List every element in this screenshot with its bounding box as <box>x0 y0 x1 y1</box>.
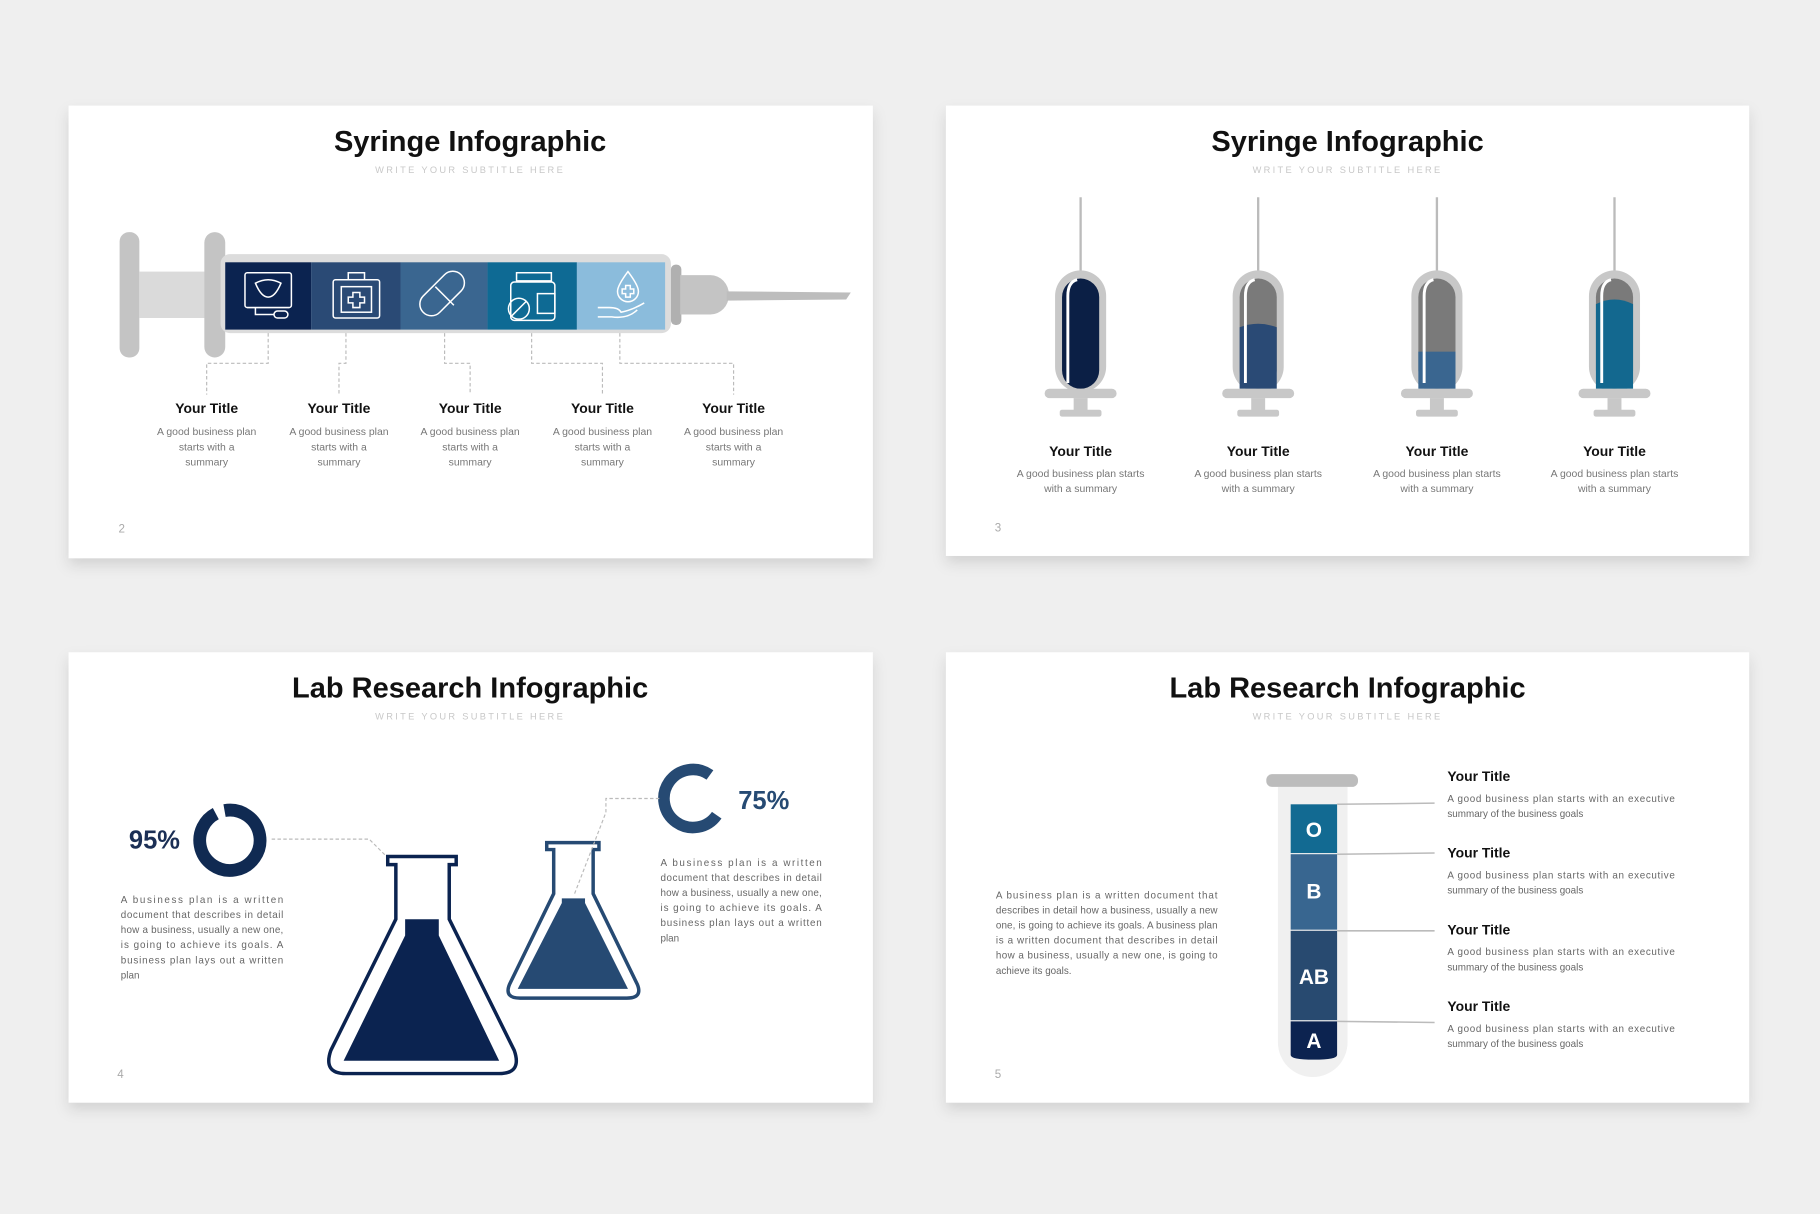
panel: syringe infographic 1 <box>69 106 873 558</box>
test tube: O <box>1306 819 1322 842</box>
text block right: plan <box>660 933 679 944</box>
subtitle: WRITE YOUR SUBTITLE HERE <box>375 712 565 722</box>
item labels: A good business plan starts with an executive <box>1447 871 1675 882</box>
item labels: A good business plan <box>684 427 783 438</box>
item labels: starts with a <box>575 442 630 453</box>
item labels: Your Title <box>571 400 634 416</box>
subtitle: WRITE YOUR SUBTITLE HERE <box>375 165 565 175</box>
test tube: A <box>1306 1030 1321 1053</box>
item labels: Your Title <box>1447 921 1510 937</box>
test tube: B <box>1306 880 1321 903</box>
text block left: one, is going to achieve its goals. A business plan <box>996 920 1218 931</box>
item labels: starts with a <box>179 442 235 453</box>
syringe labels: Your Title <box>1227 443 1290 459</box>
item labels: A good business plan <box>289 427 389 438</box>
syringe labels: Your Title <box>1405 443 1469 459</box>
text block left: how a business, usually a new one, is going to <box>996 951 1218 962</box>
syringe 4 <box>1579 197 1650 417</box>
item labels: summary of the business goals <box>1447 809 1583 820</box>
syringe labels: A good business plan starts <box>1194 469 1322 480</box>
page number: 5 <box>995 1068 1001 1081</box>
text block right: business plan lays out a written <box>660 918 822 929</box>
item labels: summary <box>581 457 625 468</box>
item labels: A good business plan <box>157 427 256 438</box>
syringe horizontal <box>120 232 851 357</box>
item labels: Your Title <box>175 400 238 416</box>
subtitle: WRITE YOUR SUBTITLE HERE <box>1253 165 1443 175</box>
text block left <box>996 890 1218 977</box>
syringe labels <box>1017 443 1678 495</box>
title: Syringe Infographic <box>1211 126 1484 158</box>
text block left: document that describes in detail <box>121 910 283 921</box>
text block right <box>660 858 822 944</box>
connector lines <box>207 333 734 395</box>
syringe labels: with a summary <box>1399 484 1474 495</box>
test tube: AB <box>1299 966 1329 989</box>
syringe 3 <box>1401 197 1473 417</box>
item labels: summary of the business goals <box>1447 886 1583 897</box>
panel: lab research test tube <box>946 652 1749 1103</box>
small flask <box>508 843 639 998</box>
item labels: summary of the business goals <box>1447 962 1583 973</box>
item labels: summary of the business goals <box>1447 1039 1583 1050</box>
item labels: summary <box>449 457 492 468</box>
dashed pointer right <box>575 799 659 894</box>
syringe labels: with a summary <box>1221 484 1296 495</box>
text block right: how a business, usually a new one, <box>660 888 822 899</box>
item labels: A good business plan starts with an executive <box>1447 1024 1675 1035</box>
icon: medicine bottle <box>508 273 555 320</box>
item labels: Your Title <box>702 400 765 416</box>
item labels: A good business plan starts with an executive <box>1447 947 1675 958</box>
syringe 1 <box>1045 197 1117 417</box>
item labels: Your Title <box>1447 845 1510 861</box>
connector lines <box>1337 803 1435 1022</box>
text block left: business plan lays out a written <box>121 955 283 966</box>
icon: capsule <box>415 266 469 321</box>
icon: first aid kit <box>333 273 380 318</box>
item labels: Your Title <box>1447 998 1510 1014</box>
syringe labels: with a summary <box>1043 484 1118 495</box>
95% ring <box>129 805 265 875</box>
text block left: achieve its goals. <box>996 966 1072 977</box>
item labels: A good business plan <box>421 427 520 438</box>
text block right: A business plan is a written <box>660 858 822 869</box>
item labels: Your Title <box>439 400 502 416</box>
test tube <box>1266 774 1358 1077</box>
text block left: how a business, usually a new one, <box>121 925 283 936</box>
item labels: summary <box>318 457 361 468</box>
page number: 3 <box>995 522 1001 535</box>
text block right: is going to achieve its goals. A <box>660 903 822 914</box>
dashed pointer left <box>272 839 412 882</box>
text block right: document that describes in detail <box>660 873 822 884</box>
item labels: A good business plan <box>553 427 652 438</box>
big flask <box>329 857 516 1074</box>
95% ring: 95% <box>129 826 180 854</box>
text block left <box>121 895 284 981</box>
text block left: plan <box>121 970 139 981</box>
text block left: describes in detail how a business, usually a new <box>996 905 1218 916</box>
title: Lab Research Infographic <box>292 673 648 705</box>
item labels <box>157 400 783 468</box>
page number: 4 <box>117 1068 124 1081</box>
syringe labels: A good business plan starts <box>1017 469 1144 480</box>
icon: ultrasound <box>245 273 291 318</box>
panel: syringe infographic 2 <box>946 106 1749 556</box>
syringe labels: with a summary <box>1577 484 1652 495</box>
item labels: Your Title <box>1447 768 1510 784</box>
panel: lab research flasks <box>69 652 873 1103</box>
syringe 2 <box>1222 197 1294 417</box>
text block left: is going to achieve its goals. A <box>121 940 284 951</box>
text block left: is a written document that describes in detail <box>996 936 1218 947</box>
item labels: starts with a <box>311 442 367 453</box>
item labels: summary <box>712 457 756 468</box>
syringe labels: Your Title <box>1583 443 1646 459</box>
75% ring: 75% <box>738 787 790 815</box>
syringe labels: A good business plan starts <box>1551 469 1678 480</box>
subtitle: WRITE YOUR SUBTITLE HERE <box>1253 712 1443 722</box>
page number: 2 <box>118 523 125 536</box>
text block left: A business plan is a written document that <box>996 890 1218 901</box>
icon: hand with drop <box>598 272 644 317</box>
75% ring <box>653 758 790 839</box>
item labels: Your Title <box>308 400 371 416</box>
title: Syringe Infographic <box>334 126 606 158</box>
item labels: A good business plan starts with an executive <box>1447 794 1675 805</box>
syringe labels: A good business plan starts <box>1373 469 1501 480</box>
item labels: starts with a <box>706 442 762 453</box>
text block left: A business plan is a written <box>121 895 283 906</box>
item labels: starts with a <box>442 442 498 453</box>
syringe labels: Your Title <box>1049 443 1112 459</box>
item labels: summary <box>185 457 229 468</box>
title: Lab Research Infographic <box>1169 673 1526 705</box>
item labels <box>1447 768 1675 1050</box>
